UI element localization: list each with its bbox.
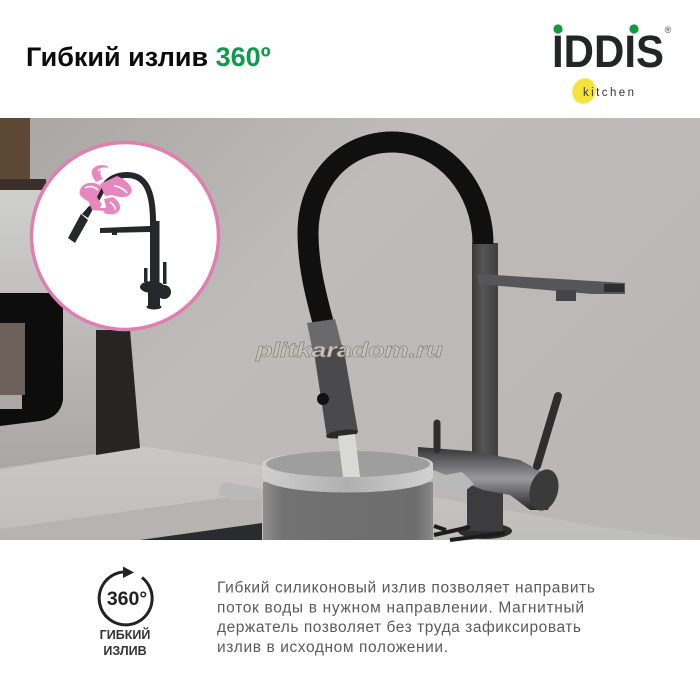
pot rim xyxy=(262,451,433,492)
yellow blob xyxy=(568,74,600,108)
icon: faucet xyxy=(68,175,171,310)
mixer body xyxy=(418,447,557,510)
logo kitchen text: kitchen xyxy=(583,87,634,99)
icon ring with arrow xyxy=(99,566,152,625)
pot xyxy=(219,434,474,540)
logo green dots xyxy=(553,24,639,34)
registered mark: ® xyxy=(665,25,672,35)
black flexible hose xyxy=(308,142,483,322)
countertop xyxy=(0,446,700,540)
description text xyxy=(217,580,595,656)
lever left xyxy=(434,423,440,450)
title: Гибкий излив 360º xyxy=(26,42,271,72)
badge number: 360° xyxy=(107,588,147,610)
lever right xyxy=(537,396,558,466)
pot handle right xyxy=(430,472,474,491)
shelf top xyxy=(0,179,46,190)
pot interior xyxy=(266,451,430,477)
photo: kitchen scene xyxy=(0,118,700,540)
stove grate xyxy=(434,526,505,540)
mixer base xyxy=(458,484,512,539)
countertop front edge xyxy=(0,497,262,540)
watermark: plitkaradom.ru xyxy=(255,340,443,362)
sink xyxy=(140,523,262,540)
panel: circular inset with faucet icon xyxy=(32,142,218,330)
description text: излив в исходном положении. xyxy=(217,639,448,656)
coffee machine body xyxy=(0,190,96,468)
badge label: ГИБКИЙ xyxy=(100,627,150,642)
description text: держатель позволяет без труда зафиксировать xyxy=(217,619,581,636)
filter water spout xyxy=(478,274,625,301)
icon: 360 badge xyxy=(99,566,152,658)
mixer end cap xyxy=(525,466,563,514)
pot handle left xyxy=(219,482,272,500)
wall xyxy=(0,118,700,540)
description text: поток воды в нужном направлении. Магнитный xyxy=(217,600,584,616)
carafe xyxy=(0,323,25,395)
water stream xyxy=(338,434,360,477)
description text: Гибкий силиконовый излив позволяет направить xyxy=(217,580,595,596)
faucet column xyxy=(472,243,498,458)
wooden shelf xyxy=(0,118,30,180)
badge label: ИЗЛИВ xyxy=(103,644,147,658)
logo: IDDIS kitchen xyxy=(552,24,672,108)
pot body xyxy=(263,482,433,540)
icon: pink rotation arrows xyxy=(80,165,132,214)
sprayer head xyxy=(307,319,358,440)
coffee machine dark side xyxy=(96,330,140,455)
logo wordmark: IDDIS xyxy=(552,26,664,77)
coffee machine window xyxy=(0,293,63,426)
icon: pink arrow cut-outs xyxy=(85,168,127,210)
inset circle xyxy=(32,142,218,330)
